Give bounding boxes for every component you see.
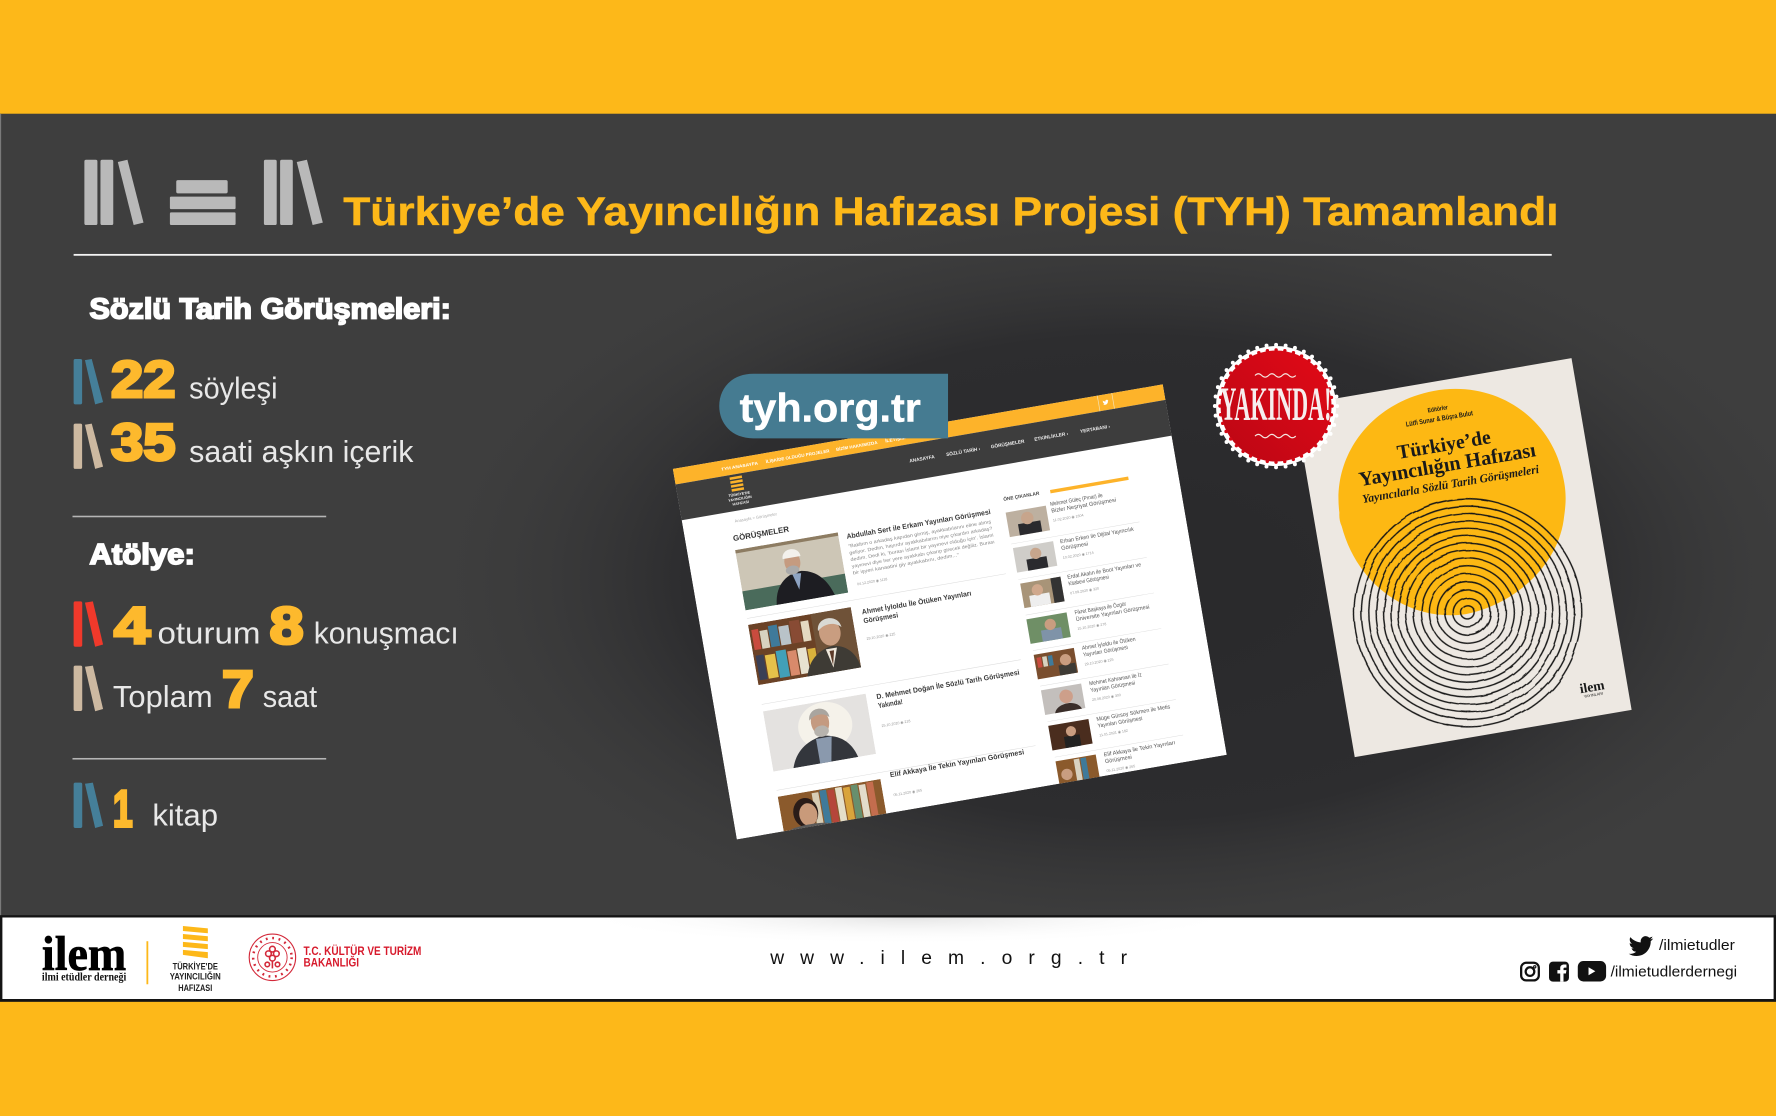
sidebar list: 11.01.2021 ◉ 182: [1099, 729, 1128, 738]
photo 2: [748, 607, 861, 685]
top bar links: İLİŞKİDE OLDUĞU PROJELER: [765, 448, 831, 464]
sidebar list: Yayınları Görüşmesi: [1090, 680, 1136, 694]
concentric rings: [1337, 481, 1599, 744]
callout: tyh.org.tr: [719, 374, 948, 438]
stat: 4 oturum 8 konuşmacı: oturum: [157, 616, 261, 650]
text: twitter handle: /ilmietudler: [1659, 938, 1735, 954]
book text: Türkiye’de: [1395, 426, 1493, 464]
sidebar list: Ahmet İyloldu ile Ötüken: [1081, 636, 1136, 652]
sidebar heading: ÖNE ÇIKANLAR: [1003, 490, 1040, 503]
article 4 text: 05.11.2020 ◉ 265: [893, 788, 922, 797]
top bar links: İLETİŞİM: [885, 435, 906, 444]
article 3 text: [876, 668, 1025, 728]
panel: dark background: [0, 114, 1776, 968]
sidebar list: 05.11.2020 ◉ 265: [1106, 764, 1136, 773]
sidebar list: Görüşmesi: [1105, 755, 1132, 765]
logo: TYH: YAYINCILIĞIN: [170, 971, 221, 983]
site logo: TÜRKİYE'DE: [728, 489, 751, 498]
top yellow band: [0, 0, 1776, 114]
sidebar list: Yayınları Görüşmesi: [1083, 645, 1128, 659]
website screenshot: [673, 384, 1227, 839]
article 1 text: geliyor. Dedim, hayırdır ayakkabılarını niye çıkardın arkadaş?: [849, 526, 993, 556]
site navigation: YERTABANI ›: [1080, 424, 1111, 435]
article 1 text: bir işyeri kanaatini giy ayakkabını, dedim...": [852, 552, 960, 577]
article 1 text: 04.12.2020 ◉ 1118: [857, 577, 888, 586]
badge: YAKINDA: [1215, 345, 1337, 467]
sidebar list: Yayınları Görüşmesi: [1097, 716, 1143, 730]
logo: TYH: HAFIZASI: [178, 983, 212, 994]
site logo: [725, 474, 753, 507]
sidebar list: 29.10.2020 ◉ 225: [1084, 658, 1114, 667]
stat: Toplam 7 saat: Toplam: [113, 680, 213, 714]
article 3 text: D. Mehmet Doğan İle Sözlü Tarih Görüşmesi: [876, 668, 1020, 701]
book text: [1349, 386, 1607, 730]
article 1 text: yayınevi diye her yere ayakkabı çıkarıp girecek değiliz. Burası: [851, 539, 995, 570]
article 1 text: Abdullah Sert ile Erkam Yayınları Görüşmesi: [846, 507, 991, 541]
article 1 text: [846, 507, 999, 587]
book text: ilem: [1579, 677, 1606, 696]
text: website: www.ilem.org.tr: [769, 948, 1128, 969]
stat: 4 oturum 8 konuşmacı: [74, 597, 459, 655]
logo: TYH: [170, 926, 221, 994]
icon: header books: [84, 160, 323, 225]
photo 4: [778, 779, 886, 832]
sidebar list: Kitabevi Görüşmesi: [1068, 575, 1109, 588]
logo: TYH: TÜRKİYE'DE: [173, 962, 218, 973]
article 3 text: Yakında!: [877, 697, 903, 710]
text: ministry name: T.C. KÜLTÜR VE TURİZM: [304, 943, 421, 958]
sidebar list: 15.10.2020 ◉ 278: [1077, 622, 1107, 631]
sidebar list: Görüşmesi: [1061, 541, 1089, 552]
yellow blob: [1321, 372, 1583, 632]
heading: Atölye: Atölye:: [89, 538, 195, 570]
stat: 1 kitap: [74, 780, 218, 838]
sidebar list: Bizler Neşriyat Görüşmesi: [1051, 498, 1117, 515]
stat: 22 söyleşi: [74, 351, 278, 409]
bottom yellow band: [0, 1001, 1776, 1116]
stat: 4 oturum 8 konuşmacı: 8: [270, 597, 304, 655]
icon: youtube: [1578, 961, 1606, 981]
sidebar list: 11.02.2020 ◉ 1604: [1053, 513, 1084, 523]
stat: 22 söyleşi: 22: [111, 351, 176, 409]
article 3 text: 25.10.2020 ◉ 218: [881, 719, 911, 728]
stat: Toplam 7 saat: saat: [263, 680, 318, 714]
top bar links: BİZİM HAKKIMIZDA: [836, 440, 878, 452]
sidebar list: 20.08.2020 ◉ 300: [1092, 693, 1121, 702]
sidebar list: Müge Gürsoy Sökmen ile Metis: [1096, 704, 1171, 723]
article 1 text: dedim. Dedi ki, 'burası İslami bir yayınevi olduğu için'. İslami: [850, 532, 994, 563]
site logo: YAYINCILIĞIN: [728, 494, 752, 503]
sidebar list: [1005, 486, 1188, 785]
site navigation: GÖRÜŞMELER: [990, 438, 1026, 450]
site navigation: ETKİNLİKLER ›: [1034, 430, 1069, 443]
sidebar list: Mehmet Güleç (Pınar) ile: [1050, 493, 1103, 508]
book text: YAYINLARI: [1584, 692, 1603, 699]
sidebar heading: [1003, 474, 1129, 503]
stat: 22 söyleşi: söyleşi: [189, 372, 278, 406]
sidebar list: Mehmet Kahraman ile İz: [1089, 671, 1142, 687]
sidebar list: Erhan Erken ile Dijital Yayıncılık: [1060, 527, 1135, 545]
sidebar list: 10.02.2020 ◉ 1714: [1063, 551, 1094, 560]
stat: Toplam 7 saat: [74, 661, 318, 719]
top bar links: TYH ANASAYFA: [721, 461, 758, 472]
stat: 1 kitap: kitap: [152, 799, 218, 833]
breadcrumb: Anasayfa > Görüşmeler: [734, 511, 778, 524]
logo: ilem: ilem: [42, 927, 126, 981]
sidebar list: Erdal Akalın ile Boot Yayınları ve: [1067, 562, 1142, 581]
article 2 text: 29.10.2020 ◉ 225: [866, 632, 896, 641]
top bar links: [720, 393, 1115, 476]
stat: 35 saati aşkın içerik: [74, 414, 414, 472]
section heading: GÖRÜŞMELER: [732, 525, 790, 543]
article 1 text: "Bakltım o arkadaş kapıdan girmiş, ayakkabılarını eline almış: [848, 519, 992, 550]
text: YAKINDA!: [1220, 379, 1331, 431]
photo 1: [735, 532, 848, 610]
stat: 1 kitap: 1: [113, 780, 133, 838]
book cover: [1295, 358, 1632, 757]
sidebar list: 07.09.2020 ◉ 320: [1070, 587, 1099, 595]
stat: 35 saati aşkın içerik: saati aşkın içerik: [189, 435, 414, 469]
article 4 text: [889, 747, 1028, 797]
site navigation: SÖZLÜ TARİH ›: [946, 445, 981, 458]
text: ministry name: [304, 943, 421, 970]
stat: 4 oturum 8 konuşmacı: konuşmacı: [314, 616, 459, 650]
sidebar list: Elif Akkaya ile Tekin Yayınları: [1103, 740, 1176, 758]
article 2 text: Ahmet İyloldu İle Ötüken Yayınları: [861, 589, 972, 616]
heading: Sözlü Tarih Görüşmeleri: Sözlü Tarih Görüşmeleri:: [89, 292, 451, 324]
logo: ministry emblem: [249, 934, 296, 981]
text: social handle: /ilmietudlerdernegi: [1611, 965, 1737, 981]
icon: twitter: [1629, 936, 1653, 956]
title: Türkiye’de Yayıncılığın Hafızası Projesi (TYH) Tamamlandı: [343, 189, 1559, 234]
article 4 text: Elif Akkaya İle Tekin Yayınları Görüşmesi: [889, 747, 1025, 779]
book text: Yayıncılığın Hafızası: [1357, 439, 1538, 491]
stat: 4 oturum 8 konuşmacı: 4: [114, 597, 150, 655]
article 2 text: Görüşmesi: [863, 610, 899, 625]
book text: Editörler: [1427, 404, 1449, 415]
icon: facebook: [1549, 962, 1569, 982]
sidebar list: Fikret Başkaya ile Özgür: [1074, 601, 1127, 616]
book text: Yayıncılarla Sözlü Tarih Görüşmeleri: [1361, 462, 1541, 506]
logo: ilem: ilmi etüdler derneği: [42, 970, 127, 984]
footer panel: [0, 890, 1776, 1002]
site navigation: ANASAYFA: [909, 454, 936, 464]
photo 3: [763, 694, 876, 772]
icon: instagram: [1521, 963, 1539, 980]
stat: Toplam 7 saat: 7: [222, 661, 254, 719]
stat: 35 saati aşkın içerik: 35: [111, 414, 176, 472]
book text: Lütfi Sunar & Büşra Bulut: [1405, 410, 1474, 429]
sidebar list: Üniversite Yayınları Görüşmesi: [1075, 603, 1150, 623]
article 2 text: [861, 589, 976, 641]
callout: tyh.org.tr: tyh.org.tr: [740, 386, 921, 430]
site logo: HAFIZASI: [732, 500, 749, 507]
text: ministry name: BAKANLIĞI: [304, 955, 359, 970]
site navigation: [909, 423, 1111, 464]
